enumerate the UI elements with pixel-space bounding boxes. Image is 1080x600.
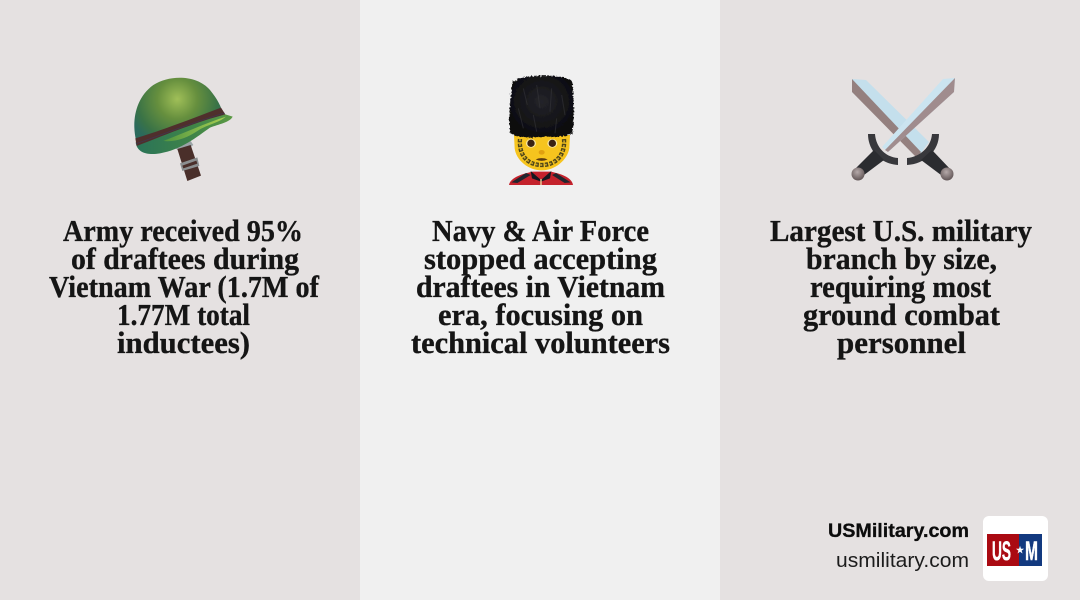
icon: royal guard bbox=[509, 76, 574, 185]
heading: largest branch: ground combat bbox=[803, 297, 1001, 332]
heading: navy and air force: Navy & Air Force bbox=[432, 213, 649, 248]
heading: army: inductees) bbox=[117, 325, 250, 360]
brand name: USMilitary.com bbox=[828, 520, 969, 542]
heading: largest branch: Largest U.S. military bbox=[770, 213, 1032, 248]
panel: navy and air force bbox=[360, 0, 720, 600]
panel: army bbox=[0, 0, 360, 600]
heading: navy and air force: stopped accepting bbox=[424, 241, 657, 276]
icon: crossed swords bbox=[852, 78, 955, 180]
logo: US bbox=[992, 536, 1011, 566]
logo bbox=[983, 516, 1048, 581]
heading: army: of draftees during bbox=[71, 241, 299, 276]
heading: navy and air force bbox=[411, 213, 670, 360]
heading: largest branch: branch by size, bbox=[806, 241, 997, 276]
heading: largest branch: requiring most bbox=[810, 269, 992, 304]
heading: army: 1.77M total bbox=[117, 297, 250, 332]
panel: largest branch bbox=[720, 0, 1080, 600]
heading: army: Vietnam War (1.7M of bbox=[49, 269, 320, 304]
logo: ★ bbox=[1016, 545, 1025, 555]
logo: M bbox=[1025, 536, 1038, 566]
heading: largest branch: personnel bbox=[837, 325, 966, 360]
brand url: usmilitary.com bbox=[836, 550, 969, 572]
heading: largest branch bbox=[770, 213, 1032, 360]
heading: navy and air force: era, focusing on bbox=[438, 297, 643, 332]
heading: army: Army received 95% bbox=[63, 213, 303, 248]
heading: army bbox=[49, 213, 320, 360]
heading: navy and air force: draftees in Vietnam bbox=[416, 269, 665, 304]
icon: army helmet bbox=[134, 78, 233, 181]
heading: navy and air force: technical volunteers bbox=[411, 325, 670, 360]
